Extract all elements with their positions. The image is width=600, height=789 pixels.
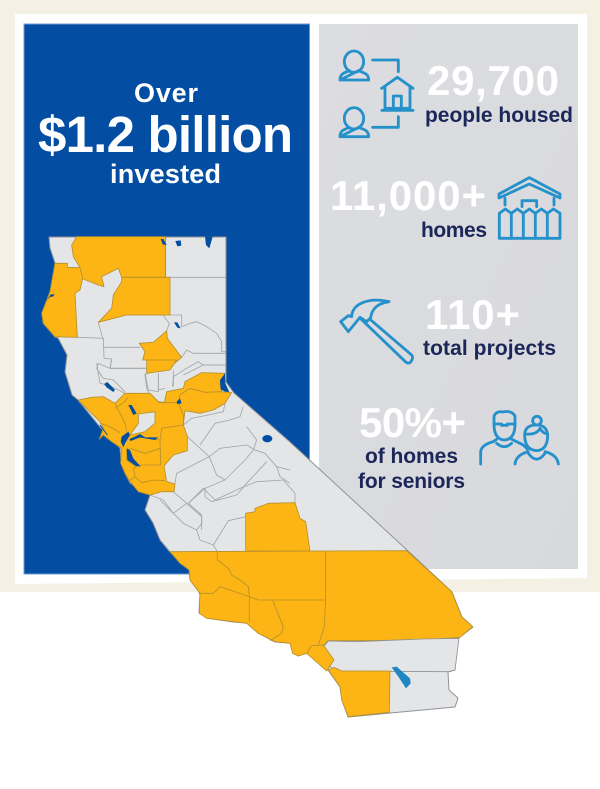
stat: homes [330, 172, 560, 242]
panel: blue investment panel [24, 24, 310, 574]
stat: total projects [341, 291, 556, 363]
stat: homes: homes [421, 219, 487, 242]
stat: homes for seniors: 50%+ [359, 399, 466, 446]
state base shape [42, 237, 473, 717]
northern lakes [47, 237, 213, 328]
icon: house behind fence [499, 178, 560, 238]
stat: homes for seniors: for seniors [358, 470, 465, 493]
stat: homes: 11,000+ [330, 172, 486, 219]
cream frame background [0, 0, 600, 592]
northern highlighted counties [42, 237, 182, 373]
stat: homes for seniors [358, 399, 558, 493]
heading: investment total: Over [134, 78, 198, 108]
icon: hammer [341, 300, 413, 363]
Suisun gray county [130, 412, 155, 435]
heading: investment total: $1.2 billion [38, 106, 293, 163]
white inner frame [15, 14, 587, 584]
map: California counties [42, 237, 473, 717]
stat: people housed [340, 51, 573, 137]
continuous highlighted region [78, 373, 232, 495]
central county borders [97, 360, 290, 530]
Tomales Bay [100, 425, 107, 435]
southern counties [160, 480, 473, 717]
icon: senior couple [481, 411, 558, 464]
lakes [104, 382, 115, 392]
panel: gray statistics panel [319, 24, 578, 569]
Bay water [121, 432, 130, 447]
northern county borders [77, 237, 226, 395]
stat: homes for seniors: of homes [365, 445, 458, 468]
Salton Sea [392, 667, 411, 688]
stat: total projects: total projects [423, 337, 556, 360]
central coast county borders [188, 480, 295, 503]
Bay Area and Sierra highlighted counties [78, 360, 272, 495]
heading: investment total [38, 78, 293, 189]
icon: people connected to house [340, 51, 413, 137]
stat: people housed: people housed [425, 104, 573, 127]
Bay Area county borders [100, 388, 222, 483]
stat: total projects: 110+ [425, 291, 520, 338]
stat: people housed: 29,700 [427, 57, 559, 104]
heading: investment total: invested [110, 159, 221, 189]
